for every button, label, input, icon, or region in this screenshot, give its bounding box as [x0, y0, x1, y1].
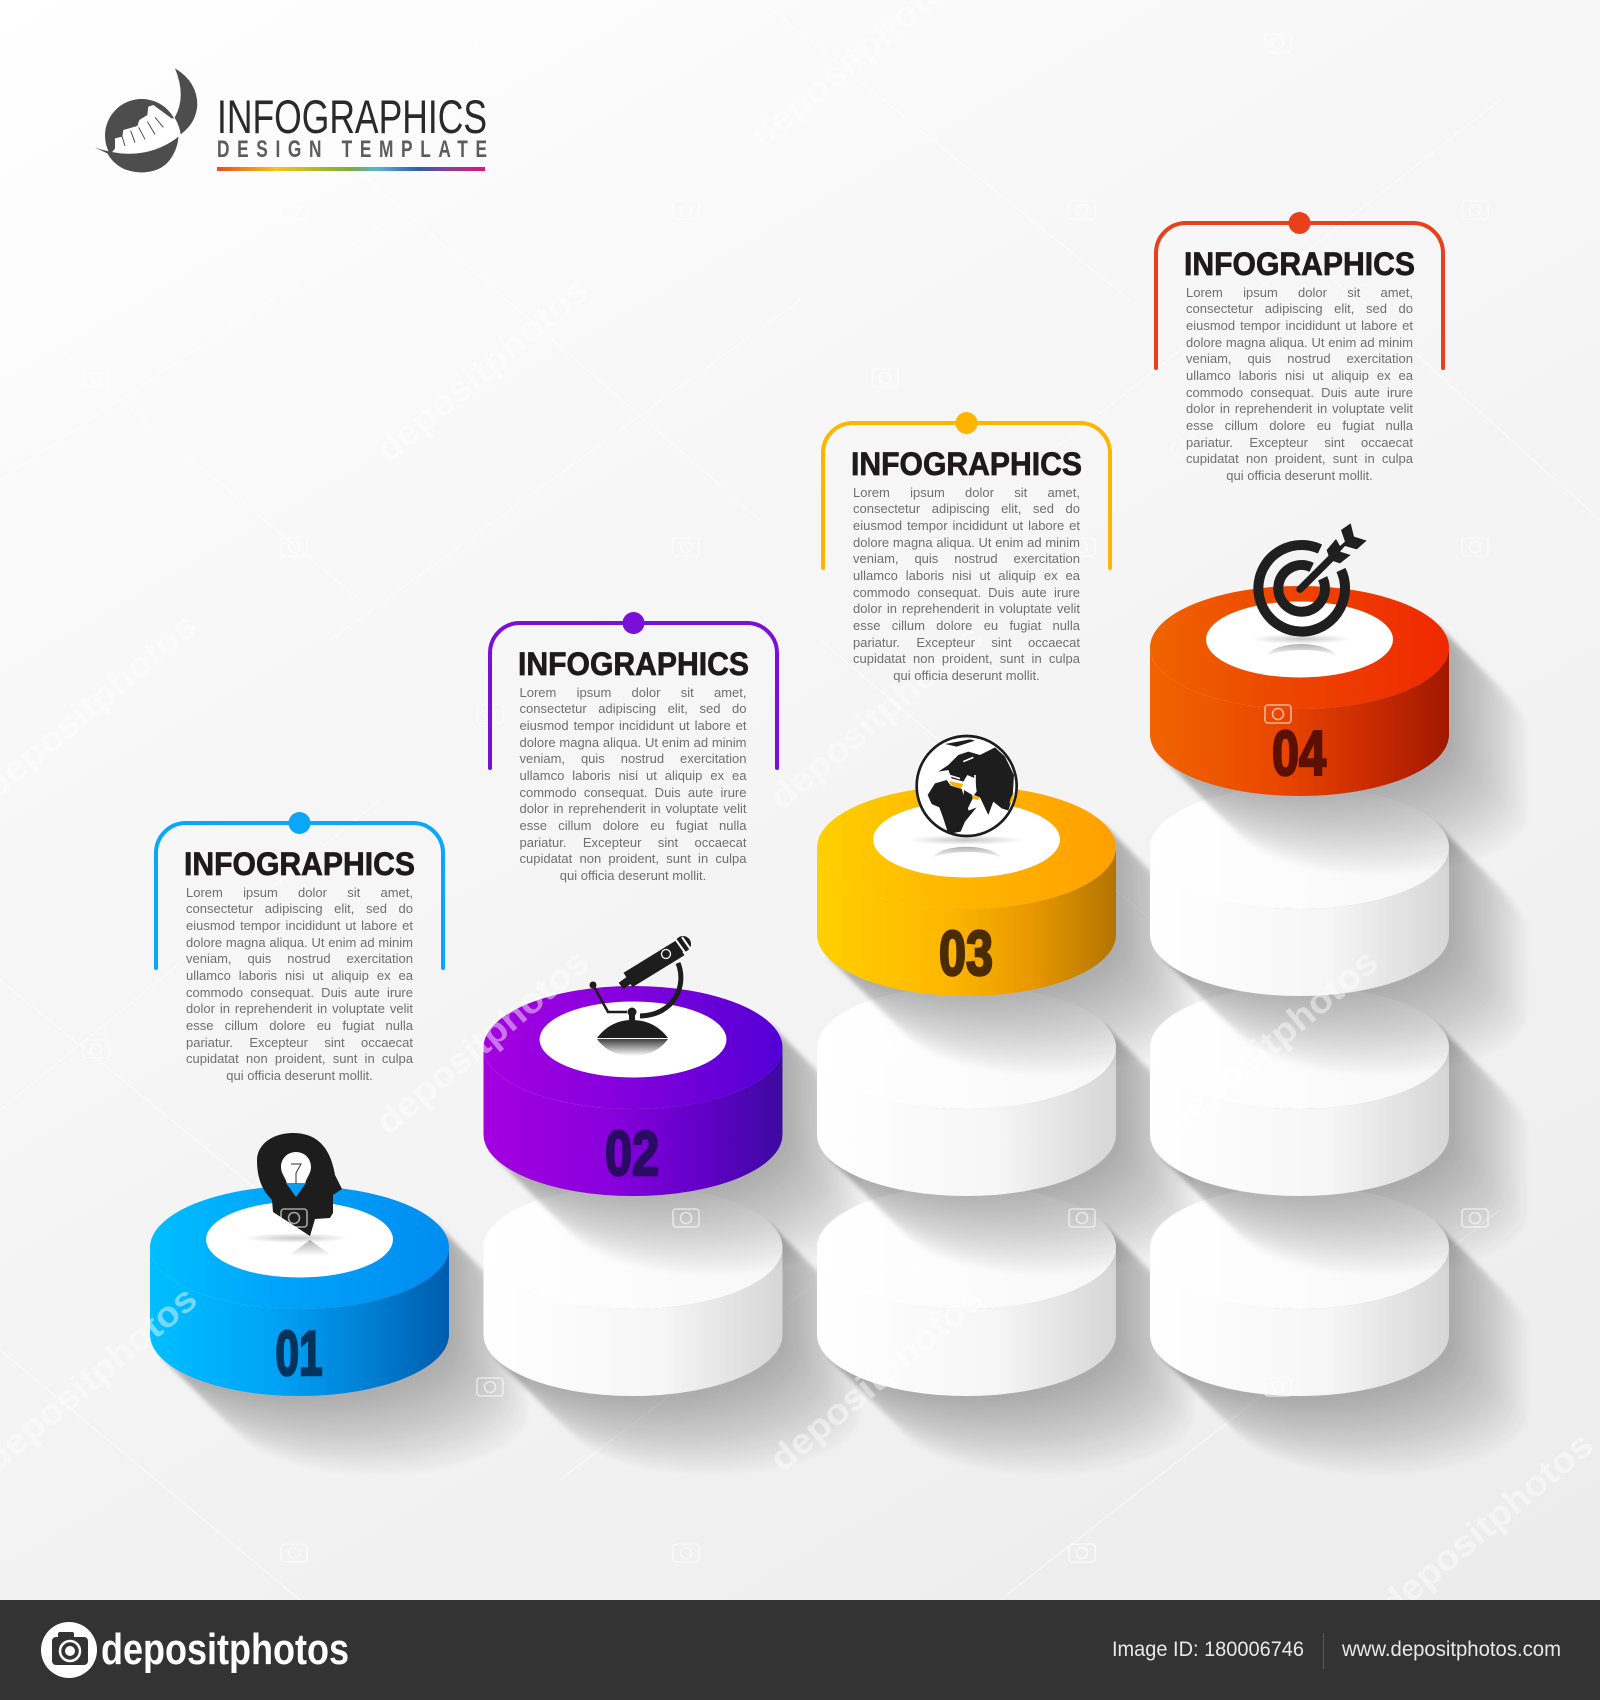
- depositphotos watermarks: depositphotos: [1371, 1424, 1600, 1625]
- panel: card 01: [154, 812, 445, 1083]
- text block: card 02 body: dolor in reprehenderit in voluptate velit: [520, 801, 746, 816]
- text block: card 02 body: cupidatat non proident, sunt in culpa: [520, 851, 746, 866]
- text block: card 03 body: consectetur adipiscing elit, sed do: [853, 501, 1080, 516]
- text block: card 03 body: dolor in reprehenderit in voluptate velit: [853, 601, 1080, 616]
- text block: card 04 body: ullamco laboris nisi ut aliquip ex ea: [1186, 368, 1413, 383]
- text block: card 04 body: dolor in reprehenderit in voluptate velit: [1186, 401, 1413, 416]
- text block: card 01 body: veniam, quis nostrud exercitation: [186, 951, 413, 966]
- header title: DESIGN TEMPLATE: [217, 136, 487, 163]
- text block: card 04 body: esse cillum dolore eu fugiat nulla: [1186, 418, 1413, 433]
- text block: card 01 body: dolore magna aliqua. Ut enim ad minim: [186, 935, 413, 950]
- footer image id: Image ID: 180006746: [1112, 1638, 1304, 1661]
- text block: card 03 body: qui officia deserunt mollit.: [893, 668, 1040, 683]
- footer logo: [41, 1622, 349, 1678]
- text block: card 02 body: pariatur. Excepteur sint occaecat: [520, 835, 746, 850]
- icon: microscope: [590, 936, 691, 1056]
- text block: card 04 body: veniam, quis nostrud exercitation: [1186, 351, 1413, 366]
- header title: INFOGRAPHICS: [217, 90, 487, 143]
- depositphotos watermarks: depositphotos: [761, 1278, 991, 1479]
- text block: card 02 body: eiusmod tempor incididunt ut labore et: [520, 718, 746, 733]
- text block: card 02 body: [520, 684, 746, 883]
- column 1: blue cylinder: 01: [276, 1319, 322, 1389]
- icon: head with light bulb: [257, 1133, 342, 1236]
- header logo icon: [95, 68, 197, 172]
- text block: card 04 body: eiusmod tempor incididunt ut labore et: [1186, 318, 1413, 333]
- header title: [217, 90, 487, 171]
- column 3: yellow cylinder: 03: [939, 919, 993, 989]
- text block: card 04 body: Lorem ipsum dolor sit amet,: [1186, 284, 1413, 300]
- text block: card 03 body: pariatur. Excepteur sint occaecat: [853, 635, 1080, 650]
- text block: card 01 body: commodo consequat. Duis aute irure: [186, 985, 413, 1000]
- panel: card 02: INFOGRAPHICS: [518, 646, 748, 682]
- text block: card 03 body: Lorem ipsum dolor sit amet,: [853, 484, 1080, 500]
- text block: card 02 body: ullamco laboris nisi ut aliquip ex ea: [520, 768, 746, 783]
- depositphotos watermarks: depositphotos: [367, 269, 597, 470]
- text block: card 01 body: ullamco laboris nisi ut aliquip ex ea: [186, 968, 413, 983]
- text block: card 02 body: qui officia deserunt mollit.: [560, 868, 706, 883]
- column 2: purple cylinder: 02: [605, 1119, 659, 1189]
- text block: card 04 body: pariatur. Excepteur sint occaecat: [1186, 435, 1413, 450]
- depositphotos watermarks: depositphotos: [1156, 269, 1386, 470]
- icon: globe: [917, 736, 1017, 836]
- text block: card 04 body: cupidatat non proident, sunt in culpa: [1186, 451, 1413, 466]
- text block: card 01 body: esse cillum dolore eu fugiat nulla: [186, 1018, 413, 1033]
- panel: card 03: INFOGRAPHICS: [851, 446, 1082, 482]
- text block: card 02 body: consectetur adipiscing elit, sed do: [520, 701, 746, 716]
- depositphotos watermarks: depositphotos: [1156, 941, 1386, 1142]
- column 4: white base cylinders: [1150, 786, 1527, 1473]
- text block: card 03 body: [853, 484, 1080, 683]
- column 3: white base cylinders: [817, 986, 1194, 1473]
- text block: card 01 body: pariatur. Excepteur sint occaecat: [186, 1035, 413, 1050]
- text block: card 02 body: esse cillum dolore eu fugiat nulla: [520, 818, 746, 833]
- text block: card 01 body: consectetur adipiscing elit, sed do: [186, 901, 413, 916]
- panel: card 04: INFOGRAPHICS: [1184, 246, 1415, 282]
- text block: card 03 body: veniam, quis nostrud exercitation: [853, 551, 1080, 566]
- panel: card 03: [821, 412, 1112, 683]
- column 3: yellow cylinder: [817, 786, 1194, 1073]
- text block: card 01 body: Lorem ipsum dolor sit amet,: [186, 884, 413, 900]
- depositphotos watermarks: depositphotos: [761, 616, 991, 817]
- text block: card 03 body: ullamco laboris nisi ut aliquip ex ea: [853, 568, 1080, 583]
- text block: card 01 body: dolor in reprehenderit in voluptate velit: [186, 1001, 413, 1016]
- text block: card 03 body: eiusmod tempor incididunt ut labore et: [853, 518, 1080, 533]
- column 4: orange cylinder: [1150, 586, 1527, 873]
- footer bar: [0, 1600, 1600, 1700]
- panel: card 02: [488, 612, 779, 883]
- text block: card 02 body: veniam, quis nostrud exercitation: [520, 751, 746, 766]
- text block: card 02 body: commodo consequat. Duis aute irure: [520, 785, 746, 800]
- text block: card 03 body: cupidatat non proident, sunt in culpa: [853, 651, 1080, 666]
- text block: card 04 body: commodo consequat. Duis aute irure: [1186, 385, 1413, 400]
- text block: card 04 body: [1186, 284, 1413, 483]
- text block: card 01 body: [186, 884, 413, 1083]
- panel: card 04: [1154, 212, 1445, 483]
- text block: card 03 body: commodo consequat. Duis aute irure: [853, 585, 1080, 600]
- text block: card 04 body: consectetur adipiscing elit, sed do: [1186, 301, 1413, 316]
- column 4: orange cylinder: 04: [1272, 719, 1326, 789]
- footer logo: depositphotos: [101, 1625, 349, 1674]
- text block: card 02 body: dolore magna aliqua. Ut enim ad minim: [520, 735, 746, 750]
- text block: card 01 body: cupidatat non proident, sunt in culpa: [186, 1051, 413, 1066]
- watermark camera marks: [83, 34, 1488, 1562]
- depositphotos watermarks: depositphotos: [367, 941, 597, 1142]
- text block: card 03 body: dolore magna aliqua. Ut enim ad minim: [853, 535, 1080, 550]
- text block: card 04 body: dolore magna aliqua. Ut enim ad minim: [1186, 335, 1413, 350]
- column 2: purple cylinder: [484, 986, 860, 1273]
- column 1: blue cylinder: [150, 1186, 527, 1473]
- text block: card 01 body: eiusmod tempor incididunt ut labore et: [186, 918, 413, 933]
- text block: card 01 body: qui officia deserunt mollit.: [226, 1068, 373, 1083]
- text block: card 02 body: Lorem ipsum dolor sit amet,: [520, 684, 746, 700]
- panel: card 01: INFOGRAPHICS: [184, 846, 415, 882]
- text block: card 03 body: esse cillum dolore eu fugiat nulla: [853, 618, 1080, 633]
- text block: card 04 body: qui officia deserunt mollit.: [1226, 468, 1373, 483]
- column 2: white base cylinder: [484, 1186, 860, 1473]
- footer url: www.depositphotos.com: [1341, 1638, 1561, 1661]
- icon: target with arrow: [1258, 523, 1367, 632]
